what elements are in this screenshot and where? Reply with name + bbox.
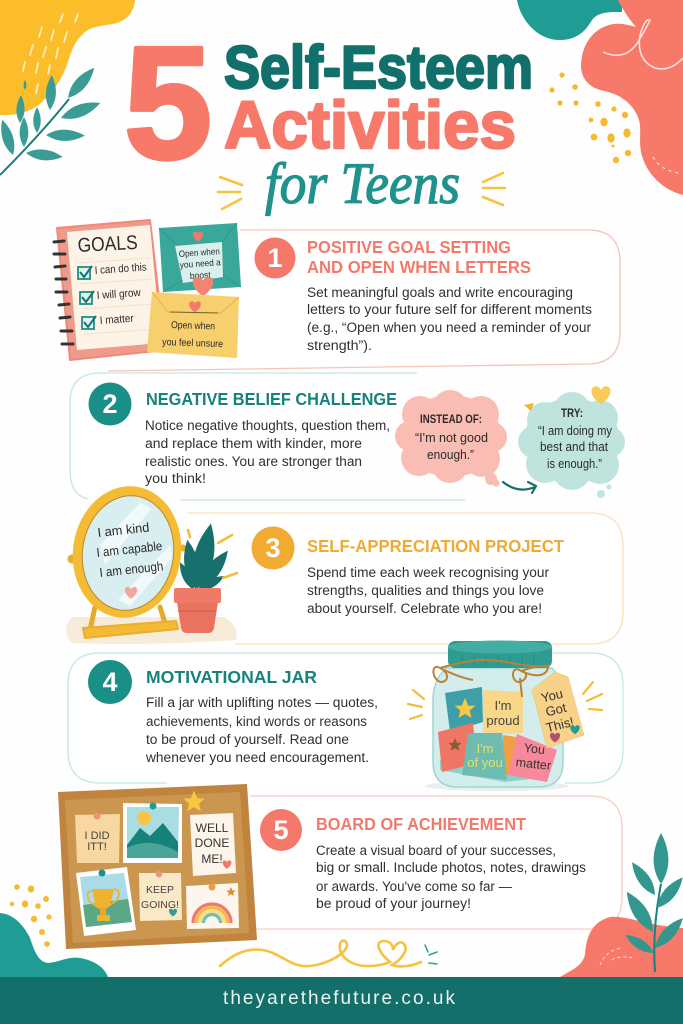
illustration: teal envelope letter: you need a	[179, 257, 221, 270]
icon: gold star	[183, 790, 205, 811]
note: well done me	[190, 813, 236, 876]
number badge 1: 1	[267, 243, 283, 273]
title: Self-Esteem: Self-Esteem	[224, 34, 533, 101]
illustration: motivational jar	[408, 640, 602, 791]
illustration: motivational jar: proud	[486, 713, 520, 728]
illustration: achievement board	[58, 784, 257, 949]
note: rainbow	[186, 883, 239, 929]
heading: board of achievement: BOARD OF ACHIEVEMENT	[316, 814, 526, 834]
illustration: motivational jar: of you	[467, 755, 503, 770]
note: keep going: KEEP	[146, 884, 174, 896]
body text 1: strength”).	[307, 338, 372, 353]
body text 1	[307, 285, 592, 353]
illustration: mirror and plant	[64, 479, 237, 644]
body text 4: whenever you need encouragement.	[145, 750, 369, 765]
illustration: teal envelope letter	[159, 223, 241, 296]
illustration: mirror and plant: I am enough	[99, 558, 164, 580]
heading: self-appreciation project: SELF-APPRECIATION PROJECT	[307, 536, 564, 556]
body text 2: you think!	[145, 471, 206, 486]
decoration: squiggle sparks	[425, 945, 437, 964]
thought bubble: try: best and that	[540, 440, 608, 454]
decoration: yellow heart squiggle	[220, 941, 421, 966]
panel: activity 4	[68, 653, 623, 783]
number badge 4: 4	[102, 667, 118, 697]
body text 5	[316, 843, 586, 911]
number badge 4	[88, 660, 132, 704]
heading: positive goal setting: AND OPEN WHEN LETTERS	[307, 257, 531, 277]
illustration: motivational jar: You	[523, 741, 546, 757]
thought bubble: instead of	[395, 390, 507, 486]
decoration: top-right coral blob	[581, 0, 683, 195]
body text 3: about yourself. Celebrate who you are!	[307, 601, 542, 616]
illustration: motivational jar: Got	[544, 700, 568, 719]
number badge 1	[254, 238, 296, 278]
illustration: motivational jar: You	[539, 686, 564, 706]
number badge 5: 5	[273, 815, 289, 845]
illustration: motivational jar: I'm	[495, 698, 511, 713]
thought bubble: instead of: INSTEAD OF:	[420, 412, 482, 426]
thought bubble: try: TRY:	[561, 406, 583, 420]
decoration: title sparks	[218, 173, 505, 209]
body text 3: Spend time each week recognising your	[307, 565, 550, 580]
illustration: goals notebook	[54, 220, 165, 360]
body text 2: and replace them with kinder, more	[145, 436, 362, 451]
panel: activity 3	[188, 513, 623, 644]
illustration: motivational jar: matter	[515, 755, 552, 773]
illustration: yellow envelope letter	[147, 292, 239, 358]
body text 1: (e.g., “Open when you need a reminder of your	[307, 320, 591, 335]
number badge 3	[252, 526, 294, 570]
thought bubble: try: is enough.”	[547, 457, 602, 471]
body text 5: or awards. You've come so far —	[316, 879, 512, 894]
illustration: yellow envelope letter: you feel unsure	[162, 337, 224, 350]
heading: negative belief challenge: NEGATIVE BELIEF CHALLENGE	[146, 389, 397, 409]
body text 4: Fill a jar with uplifting notes — quotes,	[146, 695, 378, 710]
decoration: bottom-right coral blob	[560, 917, 683, 977]
body text 3	[307, 565, 550, 616]
note: well done me: ME!	[201, 852, 223, 866]
body text 5: Create a visual board of your successes,	[316, 843, 556, 858]
thought bubble: instead of: enough.”	[427, 447, 474, 462]
body text 2: Notice negative thoughts, question them,	[145, 418, 390, 433]
body text 2: realistic ones. You are stronger than	[145, 454, 362, 469]
body text 5: big or small. Include photos, notes, drawings	[316, 860, 586, 875]
photo: mountains	[123, 802, 182, 863]
body text 3: strengths, qualities and things you love	[307, 583, 544, 598]
number badge 2	[88, 382, 132, 426]
number badge 2: 2	[102, 389, 118, 419]
note: keep going: GOING!	[141, 899, 179, 911]
decoration: top-left yellow blob	[0, 0, 135, 115]
decoration: top-right teal blob	[517, 0, 622, 40]
illustration: motivational jar: This!	[544, 714, 575, 735]
decoration: bottom-left yellow dots	[10, 884, 52, 947]
number badge 3: 3	[265, 533, 281, 563]
heading: motivational jar: MOTIVATIONAL JAR	[146, 667, 317, 687]
heading: positive goal setting	[307, 237, 531, 277]
number badge 5	[260, 809, 302, 851]
note: I did it	[75, 812, 120, 863]
note: well done me: WELL	[196, 821, 229, 835]
body text 4: achievements, kind words or reasons	[146, 714, 367, 729]
panel: activity 2	[70, 373, 465, 500]
illustration: goals notebook: I will grow	[96, 287, 141, 302]
decoration: top-right yellow dots	[549, 72, 631, 163]
decoration: bottom-left teal blob	[0, 913, 108, 977]
arrow: instead of to try	[503, 482, 536, 493]
body text 2	[145, 418, 390, 486]
body text 4	[145, 695, 378, 765]
title: Activities: Activities	[224, 88, 516, 163]
decoration: bottom-right plant	[600, 833, 683, 972]
illustration: teal envelope letter: boost	[189, 270, 212, 281]
footer band	[0, 977, 683, 1024]
title: for Teens: for Teens	[265, 151, 460, 216]
heading: positive goal setting: POSITIVE GOAL SETTING	[307, 237, 511, 257]
title: large number 5: 5	[124, 13, 212, 192]
thought bubble: instead of: “I'm not good	[415, 430, 488, 445]
body text 4: to be proud of yourself. Read one	[146, 732, 349, 747]
note: well done me: DONE	[195, 836, 229, 850]
illustration: goals notebook: I can do this	[94, 261, 148, 277]
note: keep going	[139, 871, 182, 921]
panel: activity 1	[108, 230, 620, 371]
illustration: teal envelope letter: Open when	[178, 246, 220, 259]
note: I did it: I DID	[84, 830, 110, 842]
decoration: top-left leaf branch	[0, 64, 102, 175]
body text 1: letters to your future self for different moments	[307, 302, 592, 317]
thought bubble: try: “I am doing my	[538, 424, 613, 438]
illustration: mirror and plant: I am capable	[96, 538, 163, 560]
illustration: goals notebook: I matter	[99, 313, 134, 327]
body text 5: be proud of your journey!	[316, 896, 471, 911]
note: I did it: ITT!	[87, 841, 107, 853]
panel: activity 5	[250, 796, 622, 929]
illustration: goals notebook: GOALS	[77, 232, 138, 257]
thought bubble: try	[518, 386, 625, 498]
photo: trophy	[76, 867, 136, 936]
footer website: theyarethefuture.co.uk	[223, 988, 456, 1009]
illustration: mirror and plant: I am kind	[97, 520, 150, 540]
illustration: motivational jar: I'm	[477, 741, 493, 756]
illustration: yellow envelope letter: Open when	[171, 320, 215, 333]
body text 1: Set meaningful goals and write encouraging	[307, 285, 573, 300]
